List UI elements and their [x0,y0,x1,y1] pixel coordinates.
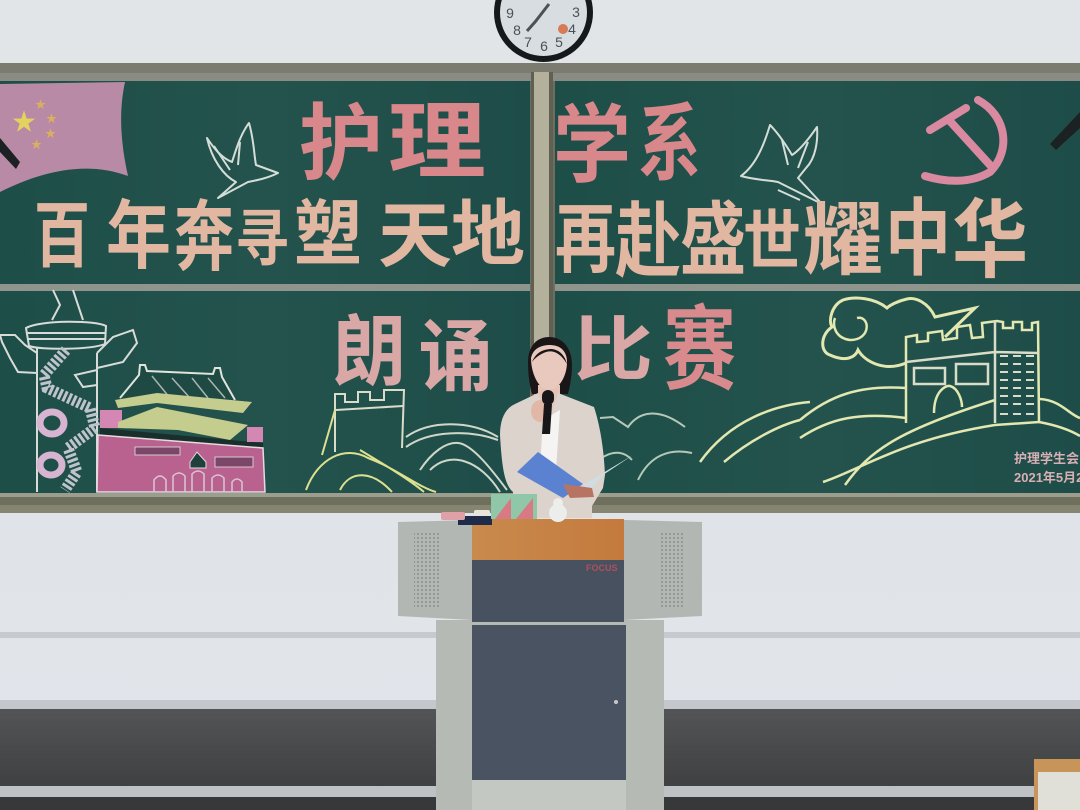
stage platform [0,709,1080,810]
white figurine [549,504,567,522]
face [531,345,567,390]
slogan line: 耀 [803,196,883,285]
white paper [583,455,633,490]
flag [0,82,128,192]
slogan line: 再 [555,198,616,283]
flag: ★ [12,109,36,136]
wall clock: 7 [524,34,532,50]
podium side panels [398,520,472,620]
icon: left dove [207,123,278,198]
title line 1 [299,95,701,194]
board panel: bottom left [0,291,530,493]
slogan line: 地 [451,195,525,275]
hair [528,337,572,394]
title line 1: 理 [388,95,486,189]
slogan line: 百 [34,197,90,277]
wall clock: 9 [506,5,514,21]
hand holding mic [531,400,549,422]
slogan line: 塑 [294,195,362,275]
microphone [542,390,554,405]
blackboard frame [0,63,1080,513]
title line 2: 比 [573,311,653,389]
podium logo: FOCUS [586,563,618,573]
drawing: huabiao column [0,290,137,492]
drawing: left great wall and hills [306,390,692,492]
blackboard [0,63,1080,513]
wooden desk top [472,519,624,560]
wall clock: 8 [513,22,521,38]
hand holding folder [563,484,594,498]
slogan line: 奔 [174,195,234,281]
white shirt [540,410,560,470]
title line 2: 朗 [333,308,406,396]
left and right dark marks [0,112,1080,169]
books [458,516,492,525]
slogan line: 中 [885,192,951,286]
title line 1: 学 [553,98,631,194]
speaker grilles [414,532,439,608]
title line 2: 诵 [418,313,493,401]
blue folder [517,452,583,498]
wall clock: 6 [540,38,548,54]
slogan line: 寻 [235,205,289,274]
wall clock: 5 [555,34,563,50]
slogan line [34,192,1028,289]
icon: right dove [741,125,822,204]
wall clock: 4 [568,21,576,37]
flag: ★ [31,139,42,151]
podium base [436,620,664,810]
neck [538,385,560,415]
tissue boxes [491,494,537,519]
blazer [500,393,605,518]
slogan line: 年 [106,194,171,278]
desk items [441,494,567,525]
board panel: top right [555,81,1080,284]
chalk signature: 护理学生会 [1014,451,1079,466]
table corner [1034,759,1080,810]
drawing: right great wall with cloud and hills [700,298,1080,485]
title line 1: 护 [299,97,383,191]
slogan line: 天 [378,197,452,277]
slogan line: 世 [743,204,801,278]
title line 2: 赛 [663,300,736,402]
flag: ★ [46,113,57,125]
slogan line: 赴 [615,197,681,288]
wall clock: 3 [572,4,580,20]
chalk signature [1014,451,1080,485]
wall clock [494,0,593,62]
podium [398,519,702,810]
speaker woman [500,337,633,518]
flag: ★ [35,99,46,111]
board panel: top left [0,81,530,284]
slogan line: 华 [952,193,1028,289]
icon: hammer and sickle [925,100,1003,181]
title line 2 [333,300,736,402]
title line 1: 系 [638,97,701,191]
flag: ★ [45,128,56,140]
board panel: bottom right [555,291,1080,493]
drawing: Tiananmen gate [97,365,265,492]
slogan line: 盛 [680,196,746,285]
